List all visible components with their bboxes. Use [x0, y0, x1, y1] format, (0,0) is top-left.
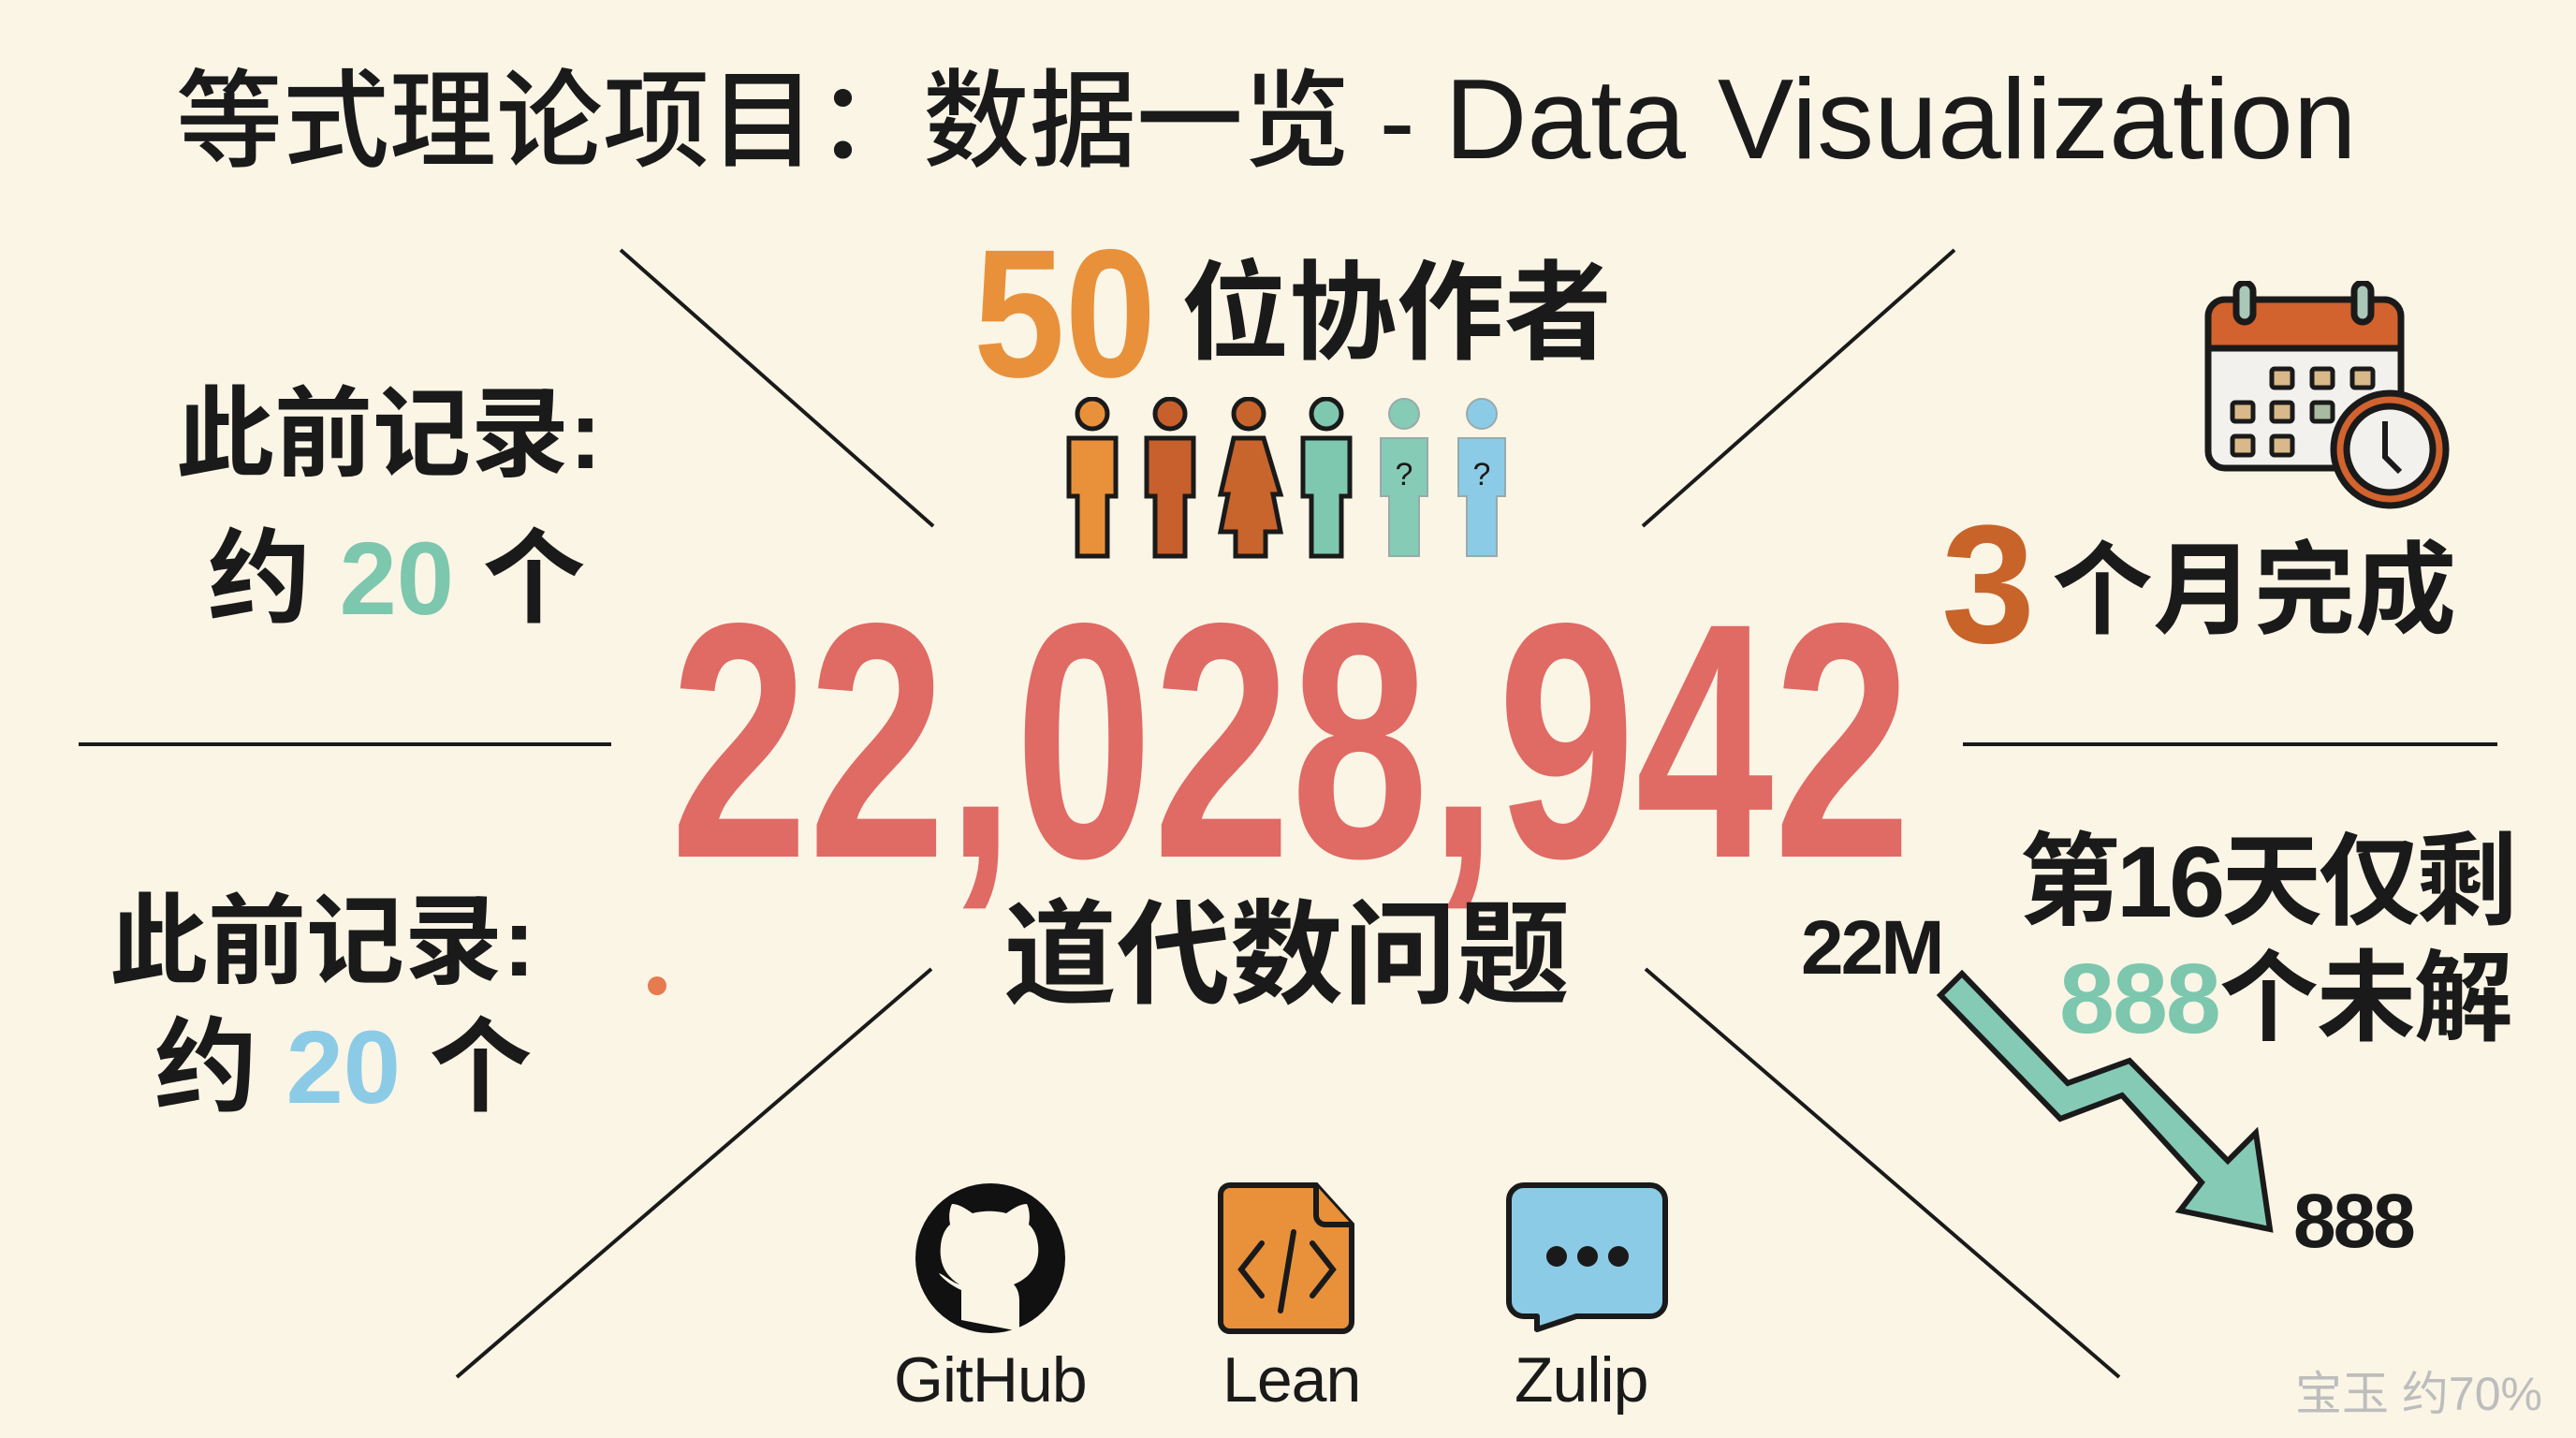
icon: people: ? — [1473, 457, 1490, 492]
text: previous record top: 此前记录: — [176, 380, 602, 490]
icon: Zulip chat — [1506, 1182, 1668, 1416]
stat: collaborators: 50 — [973, 212, 1156, 416]
icon: calendar — [2205, 281, 2449, 509]
text: day 16: 第16天仅剩 — [2019, 825, 2513, 938]
label: 888: 888 — [2293, 1179, 2413, 1264]
stat: collaborators: 位协作者 — [1181, 254, 1612, 374]
text: 888 unsolved: 888个未解 — [2059, 944, 2511, 1054]
title: 等式理论项目：数据一览 - Data Visualization — [176, 55, 2357, 183]
text: algebra problems: 道代数问题 — [1003, 891, 1570, 1019]
dot — [648, 976, 666, 995]
icon: Lean file — [1218, 1182, 1360, 1416]
label: Zulip: Zulip — [1515, 1344, 1647, 1416]
stat: 3 months: 个月完成 — [2052, 534, 2456, 647]
stat: 3 months: 3 — [1941, 491, 2035, 679]
text: about 20 top: 约 20 个 — [208, 521, 585, 637]
icon: people: ? — [1396, 457, 1412, 492]
stat: 3 months — [1941, 491, 2456, 679]
big number: 22,028,942 — [670, 553, 1911, 928]
icon: github — [894, 1183, 1087, 1416]
text: previous record bottom: 此前记录: — [110, 888, 535, 997]
label: Lean: Lean — [1222, 1344, 1360, 1416]
icon: people — [1067, 397, 1506, 558]
text: about 20 bottom: 约 20 个 — [154, 1010, 532, 1125]
watermark: 宝玉 约70% — [2295, 1368, 2542, 1420]
stat: collaborators — [973, 212, 1612, 416]
label: GitHub: GitHub — [894, 1344, 1087, 1416]
label: 22M: 22M — [1801, 905, 1942, 990]
